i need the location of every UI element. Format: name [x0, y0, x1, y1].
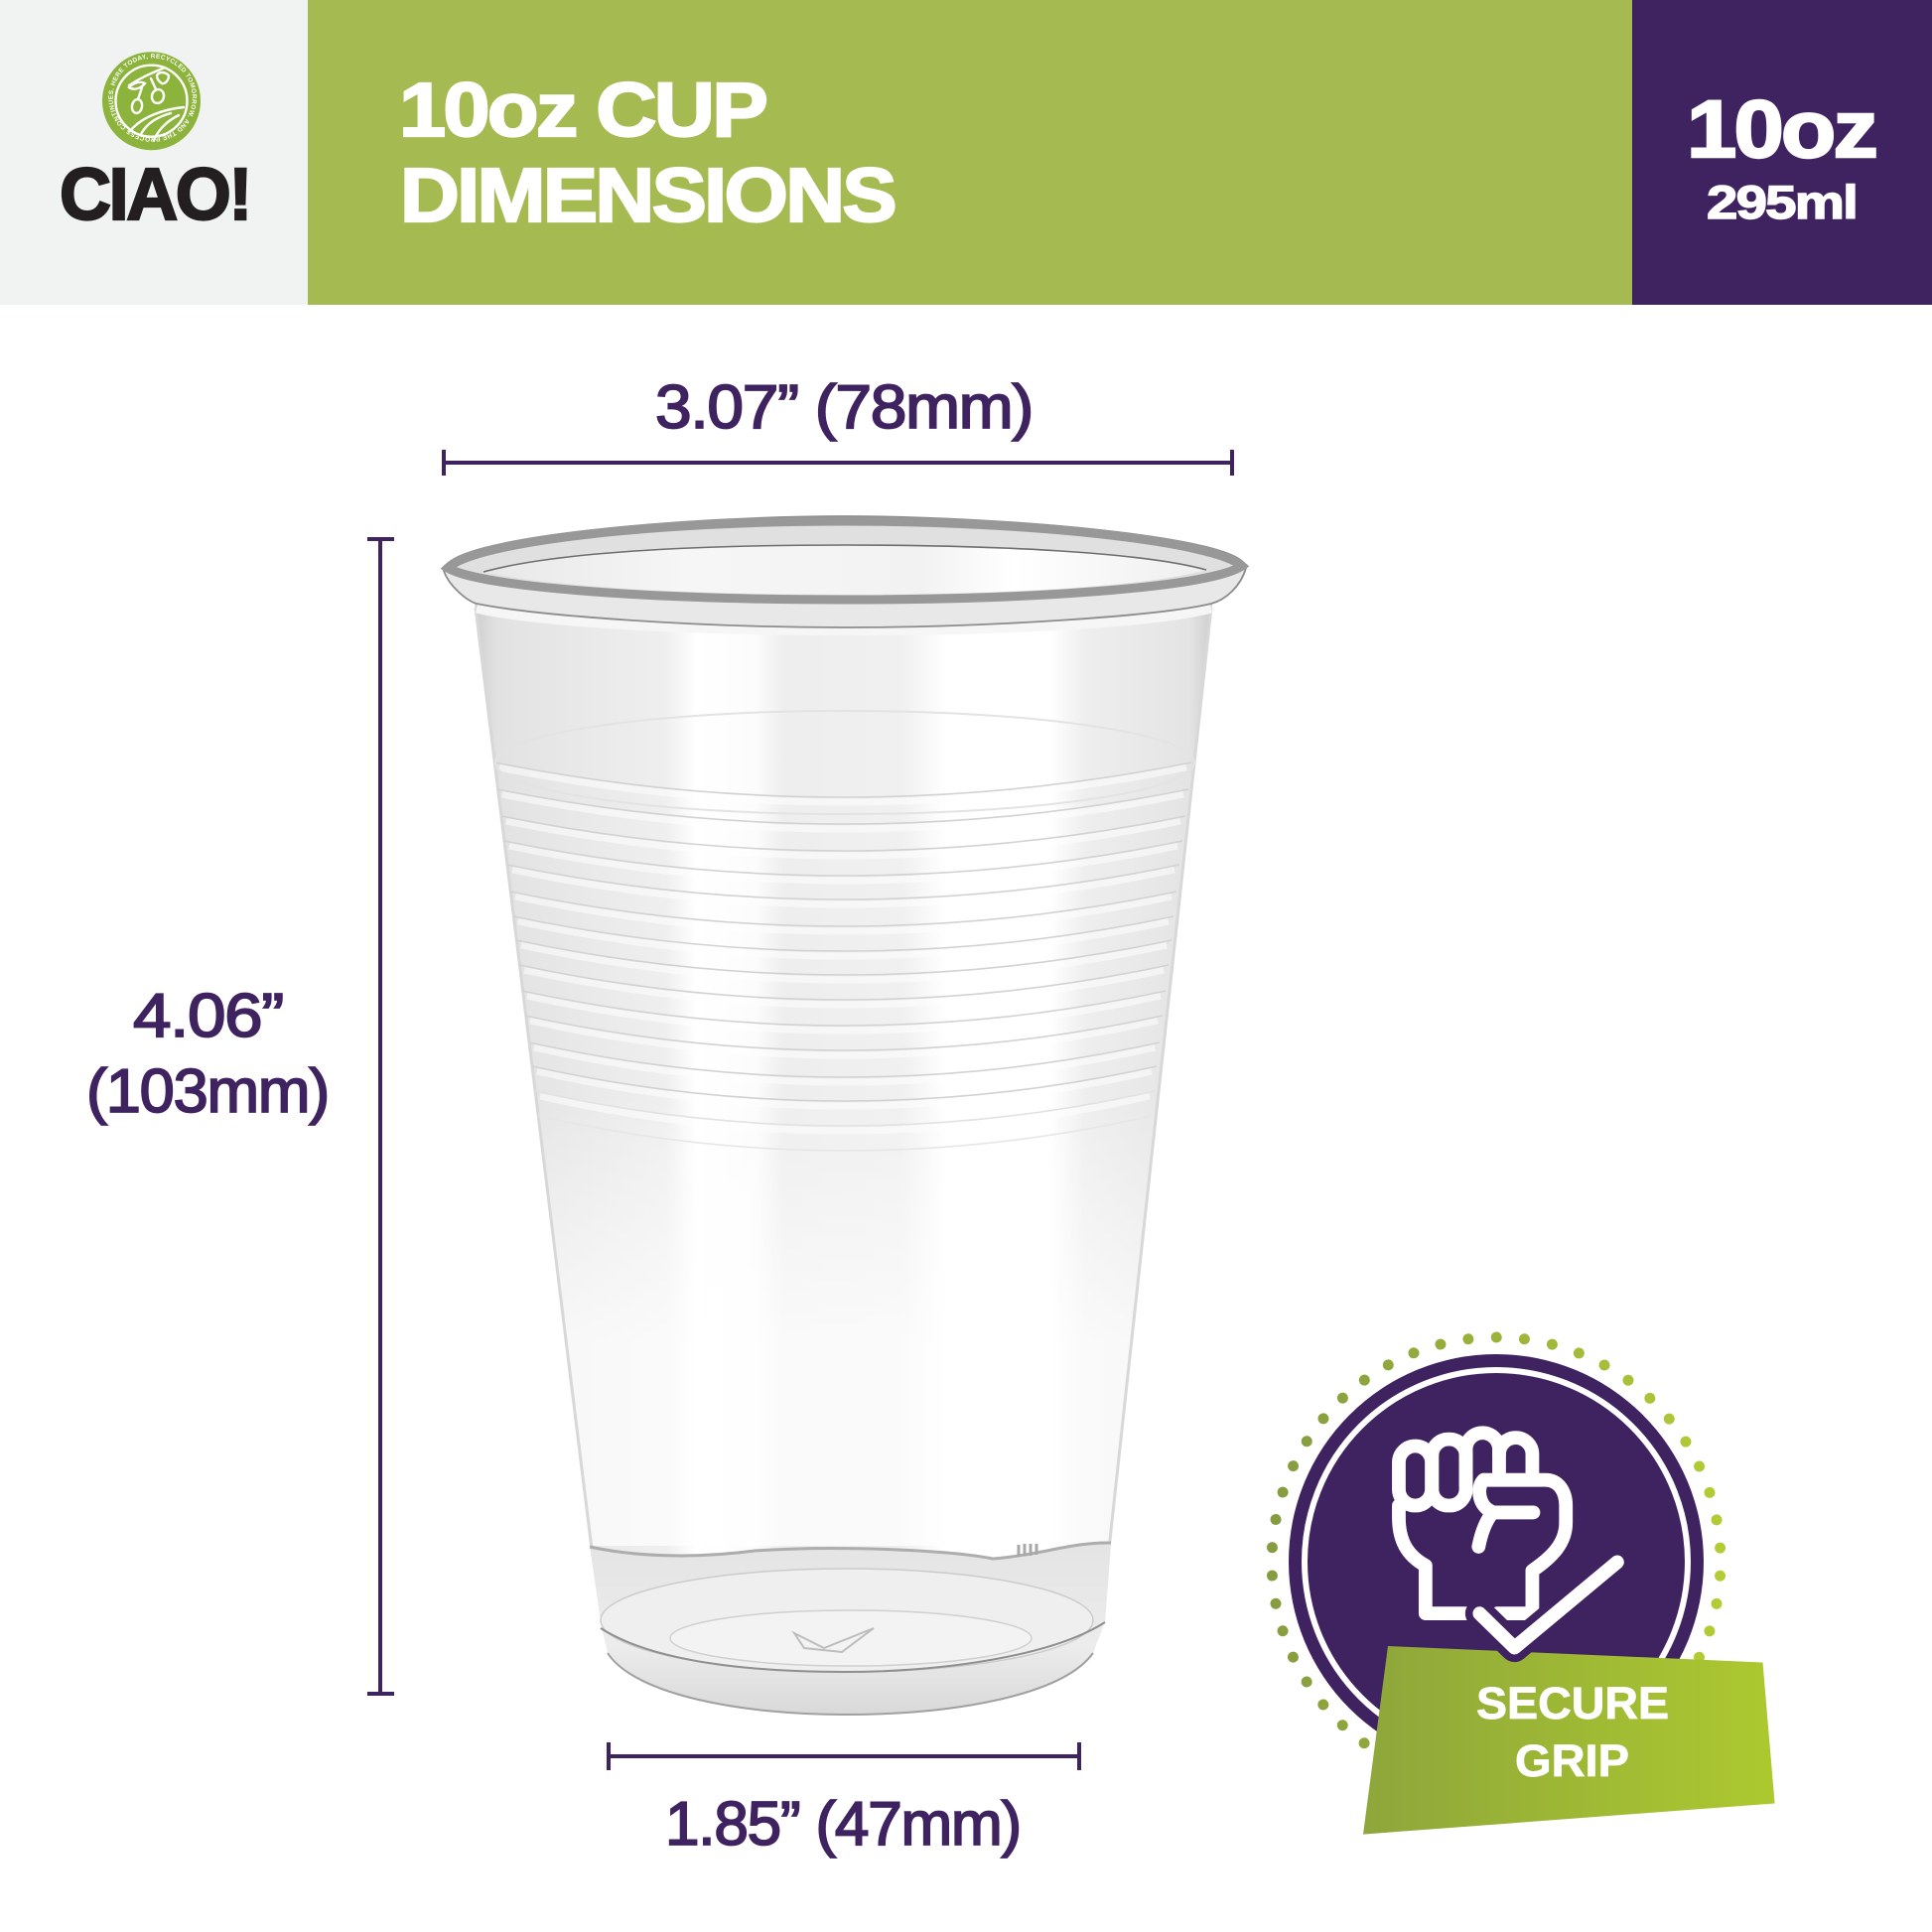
- dimension: base width: [609, 1742, 1079, 1859]
- base width arrow: [609, 1742, 1079, 1770]
- header: title panel: [308, 0, 1632, 305]
- capacity oz: 10oz: [1687, 84, 1876, 175]
- cup ribs: [494, 711, 1194, 1151]
- badge: secure grip: [1258, 1323, 1775, 1835]
- base width label: 1.85” (47mm): [665, 1790, 1021, 1859]
- dimension: height: [86, 539, 394, 1694]
- banner label: SECURE: [1476, 1678, 1669, 1728]
- height label: [86, 982, 329, 1126]
- title: [399, 68, 895, 238]
- icon: fist: [1399, 1433, 1566, 1613]
- banner label: GRIP: [1515, 1735, 1629, 1786]
- header: logo panel: [0, 0, 308, 305]
- banner label: [1476, 1678, 1669, 1786]
- height label: (103mm): [86, 1057, 329, 1126]
- logo emblem: HERE TODAY, RECYCLED TOMORROW. AND THE PROCESS CONTINUES.: [108, 54, 197, 142]
- title: 10oz CUP: [399, 68, 765, 153]
- height arrow: [367, 539, 394, 1694]
- height label: 4.06”: [133, 982, 283, 1050]
- top width arrow: [444, 450, 1232, 476]
- cup rim: [477, 609, 1211, 631]
- cup body: [473, 586, 1214, 1648]
- cup photo illustration: [444, 516, 1246, 1715]
- cup base: [590, 1543, 1111, 1715]
- dotted ring: [1258, 1323, 1734, 1800]
- logo wordmark: CIAO!: [60, 153, 250, 235]
- top width label: 3.07” (78mm): [655, 373, 1033, 442]
- title: DIMENSIONS: [400, 153, 895, 238]
- purple disc: [1289, 1354, 1704, 1769]
- capacity ml: 295ml: [1707, 176, 1857, 228]
- icon: check mark: [1479, 1562, 1617, 1648]
- green banner: [1363, 1646, 1775, 1835]
- header: size panel: [1632, 0, 1932, 305]
- dimension: top width: [444, 373, 1232, 476]
